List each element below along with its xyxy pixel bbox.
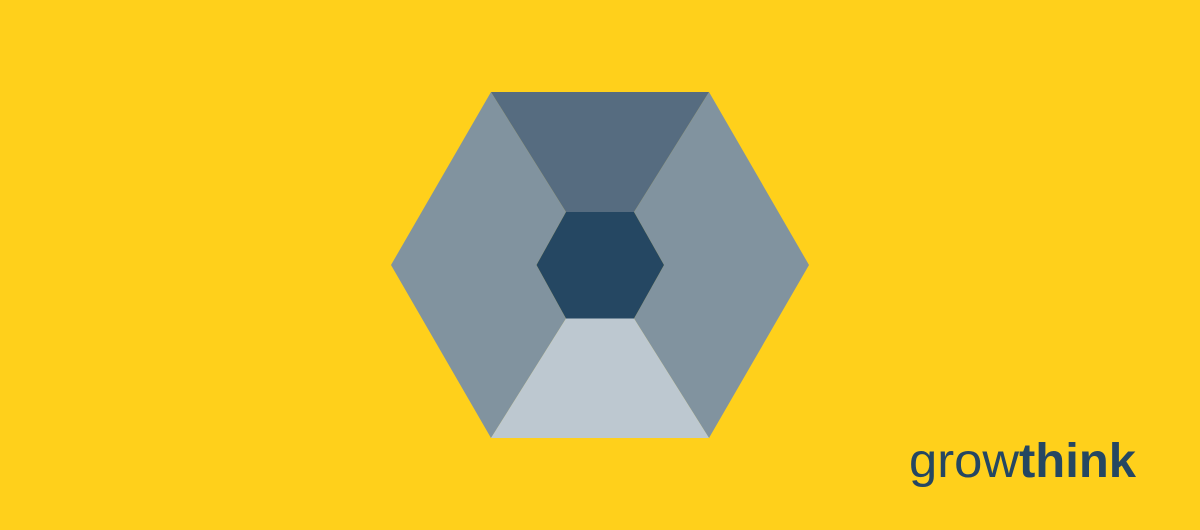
bottom segment xyxy=(491,318,709,438)
icon: segmented hexagon xyxy=(391,92,809,438)
logo: growthink wordmark: growthink xyxy=(909,435,1136,488)
top segment xyxy=(491,92,709,212)
center hexagon xyxy=(536,212,664,318)
right segment xyxy=(634,92,809,438)
left segment xyxy=(391,92,566,438)
